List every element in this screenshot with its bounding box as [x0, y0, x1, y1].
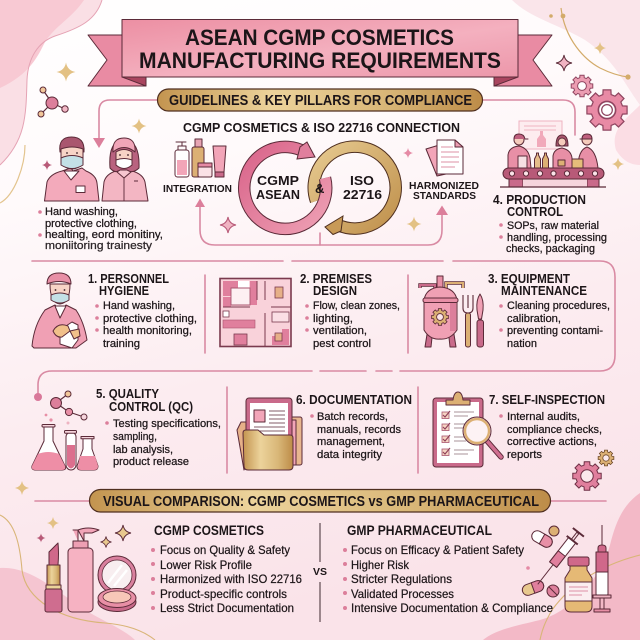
text block: gmp pharmaceutical: Stricter Regulations [351, 572, 452, 586]
heading: visual comparison pill [90, 490, 550, 512]
text block: 4 production control: SOPs, raw material [507, 220, 599, 232]
pink ring [244, 142, 326, 229]
text block: 4 production control: 4. PRODUCTION [493, 193, 586, 207]
text block: 2 premises design: DESIGN [313, 284, 357, 298]
text block: 6 documentation: manuals, records [317, 424, 401, 436]
text block: cgmp cosmetics: Focus on Quality & Safety [160, 543, 290, 557]
text block: 6 documentation [296, 393, 412, 461]
text block: 2 premises design: lighting, [313, 313, 353, 325]
text block: 2 premises design: ventilation, [313, 325, 367, 337]
heading: visual comparison pill: VISUAL COMPARISON: CGMP COSMETICS vs GMP PHARMACEUTICAL [103, 494, 539, 510]
label: harmonized standards [409, 180, 479, 202]
gold ring [314, 147, 396, 234]
text block: 1 personnel hygiene: health monitoring, [103, 325, 192, 337]
text block: 6 documentation: 6. DOCUMENTATION [296, 393, 412, 407]
icon: clipboard with magnifier [433, 392, 501, 467]
text block: gmp pharmaceutical [343, 523, 553, 615]
ring labels: & [315, 181, 324, 196]
text block: 7 self-inspection [489, 393, 605, 461]
ring labels: ISO [350, 173, 374, 188]
text block: gmp pharmaceutical: GMP PHARMACEUTICAL [347, 523, 492, 538]
title text: ASEAN CGMP COSMETICS [185, 25, 454, 50]
text block: 3 equipment maintenance [488, 272, 610, 350]
text block: 5 quality control: 5. QUALITY [96, 387, 160, 401]
text block: cgmp cosmetics: Harmonized with ISO 22716 [160, 572, 302, 586]
text block: cgmp cosmetics: Less Strict Documentation [160, 601, 294, 615]
text block: cgmp cosmetics: Lower Risk Profile [160, 558, 252, 572]
text block: 4 production control: checks, packaging [506, 243, 595, 255]
text block: 7 self-inspection: Internal audits, [507, 411, 580, 423]
text block: 5 quality control: product release [113, 456, 189, 468]
text block: 1 personnel hygiene: training [103, 338, 140, 350]
decorative sparkles [15, 42, 624, 495]
text block: 5 quality control [96, 387, 221, 468]
heading: connection: CGMP COSMETICS & ISO 22716 CONNECTION [183, 120, 460, 135]
label: integration: INTEGRATION [163, 183, 232, 195]
text block: 5 quality control: CONTROL (QC) [109, 400, 193, 414]
text block: cgmp cosmetics: CGMP COSMETICS [154, 523, 264, 538]
icon: documentation folder [237, 398, 302, 470]
text block: 7 self-inspection: reports [507, 449, 542, 461]
text block: cgmp cosmetics: Product-specific controls [160, 587, 287, 601]
text block: 4 production control [493, 193, 607, 255]
text block: 3 equipment maintenance: nation [507, 338, 537, 350]
text block: 3 equipment maintenance: MAINTENANCE [501, 284, 587, 298]
text block: gmp pharmaceutical: Higher Risk [351, 558, 410, 572]
icon: two staff with masks [44, 137, 148, 201]
icon: cosmetics set [36, 517, 136, 612]
text block: 5 quality control: lab analysis, [113, 444, 173, 456]
text block: cgmp cosmetics [151, 523, 302, 615]
text block: 7 self-inspection: 7. SELF-INSPECTION [489, 393, 605, 407]
icon: pharmaceutical set [521, 525, 611, 612]
icon: lower gears [573, 450, 614, 490]
text block: 1 personnel hygiene: HYGIENE [99, 284, 149, 298]
text block: 3 equipment maintenance: Cleaning procedures, [507, 300, 610, 312]
text: staff bullets [38, 206, 163, 252]
text block: 6 documentation: data integrity [317, 449, 382, 461]
text block: 7 self-inspection: compliance checks, [507, 424, 602, 436]
icon: floor plan [220, 278, 291, 347]
text block: 6 documentation: management, [317, 436, 385, 448]
text block: 1 personnel hygiene: protective clothing, [103, 313, 197, 325]
text block: 5 quality control: Testing specifications, [113, 418, 221, 430]
icon: cosmetic products [175, 139, 226, 177]
divider with vs label [313, 523, 327, 622]
title text: MANUFACTURING REQUIREMENTS [139, 48, 501, 73]
text: staff bullets: moniitoring trainesty [45, 240, 152, 252]
icon: top right gears [571, 75, 627, 130]
text block: 2 premises design [300, 272, 400, 350]
text block: 3 equipment maintenance: 3. EQUIPMENT [488, 272, 570, 286]
text block: gmp pharmaceutical: Validated Processes [351, 587, 454, 601]
text block: 1 personnel hygiene: 1. PERSONNEL [88, 272, 169, 286]
text block: 4 production control: CONTROL [507, 205, 563, 219]
text: staff bullets: protective clothing, [45, 218, 137, 230]
divider with vs label: VS [313, 566, 327, 578]
ring labels: ASEAN [256, 187, 300, 202]
text: staff bullets: Hand washing, [45, 206, 118, 218]
text block: gmp pharmaceutical: Focus on Efficacy & Patient Safety [351, 543, 524, 557]
text block: 6 documentation: Batch records, [317, 411, 388, 423]
icon: equipment vessel and tools [420, 276, 484, 347]
icon: personnel with mask [32, 273, 87, 348]
icon: documents [426, 140, 463, 176]
chart: interlocking rings [244, 142, 396, 234]
heading: guidelines pill: GUIDELINES & KEY PILLARS FOR COMPLIANCE [169, 93, 472, 109]
text block: gmp pharmaceutical: Intensive Documentation & Compliance [351, 601, 553, 615]
icon: production line [500, 121, 606, 187]
text block: 7 self-inspection: corrective actions, [507, 436, 597, 448]
icon: top left molecule [38, 87, 68, 117]
panel outline and flow connectors [32, 100, 615, 501]
label: harmonized standards: STANDARDS [413, 190, 476, 202]
text block: 2 premises design: pest control [313, 338, 371, 350]
text block: 1 personnel hygiene: Hand washing, [103, 300, 175, 312]
icon: laboratory glassware [32, 391, 98, 470]
title text [139, 25, 501, 73]
text block: 1 personnel hygiene [88, 272, 197, 350]
ring labels: 22716 [343, 187, 382, 202]
text block: 3 equipment maintenance: preventing contami- [507, 325, 603, 337]
ring labels [256, 173, 382, 202]
text block: 5 quality control: sampling, [113, 431, 157, 443]
text block: 2 premises design: 2. PREMISES [300, 272, 372, 286]
ring labels: CGMP [257, 173, 299, 188]
heading: guidelines pill [158, 89, 482, 111]
text: staff bullets: healting, eord monitiny, [45, 229, 163, 241]
text block: 3 equipment maintenance: calibration, [507, 313, 561, 325]
title ribbon [88, 20, 552, 86]
label: harmonized standards: HARMONIZED [409, 180, 479, 192]
text block: 4 production control: handling, processing [507, 232, 607, 244]
text block: 2 premises design: Flow, clean zones, [313, 300, 400, 312]
